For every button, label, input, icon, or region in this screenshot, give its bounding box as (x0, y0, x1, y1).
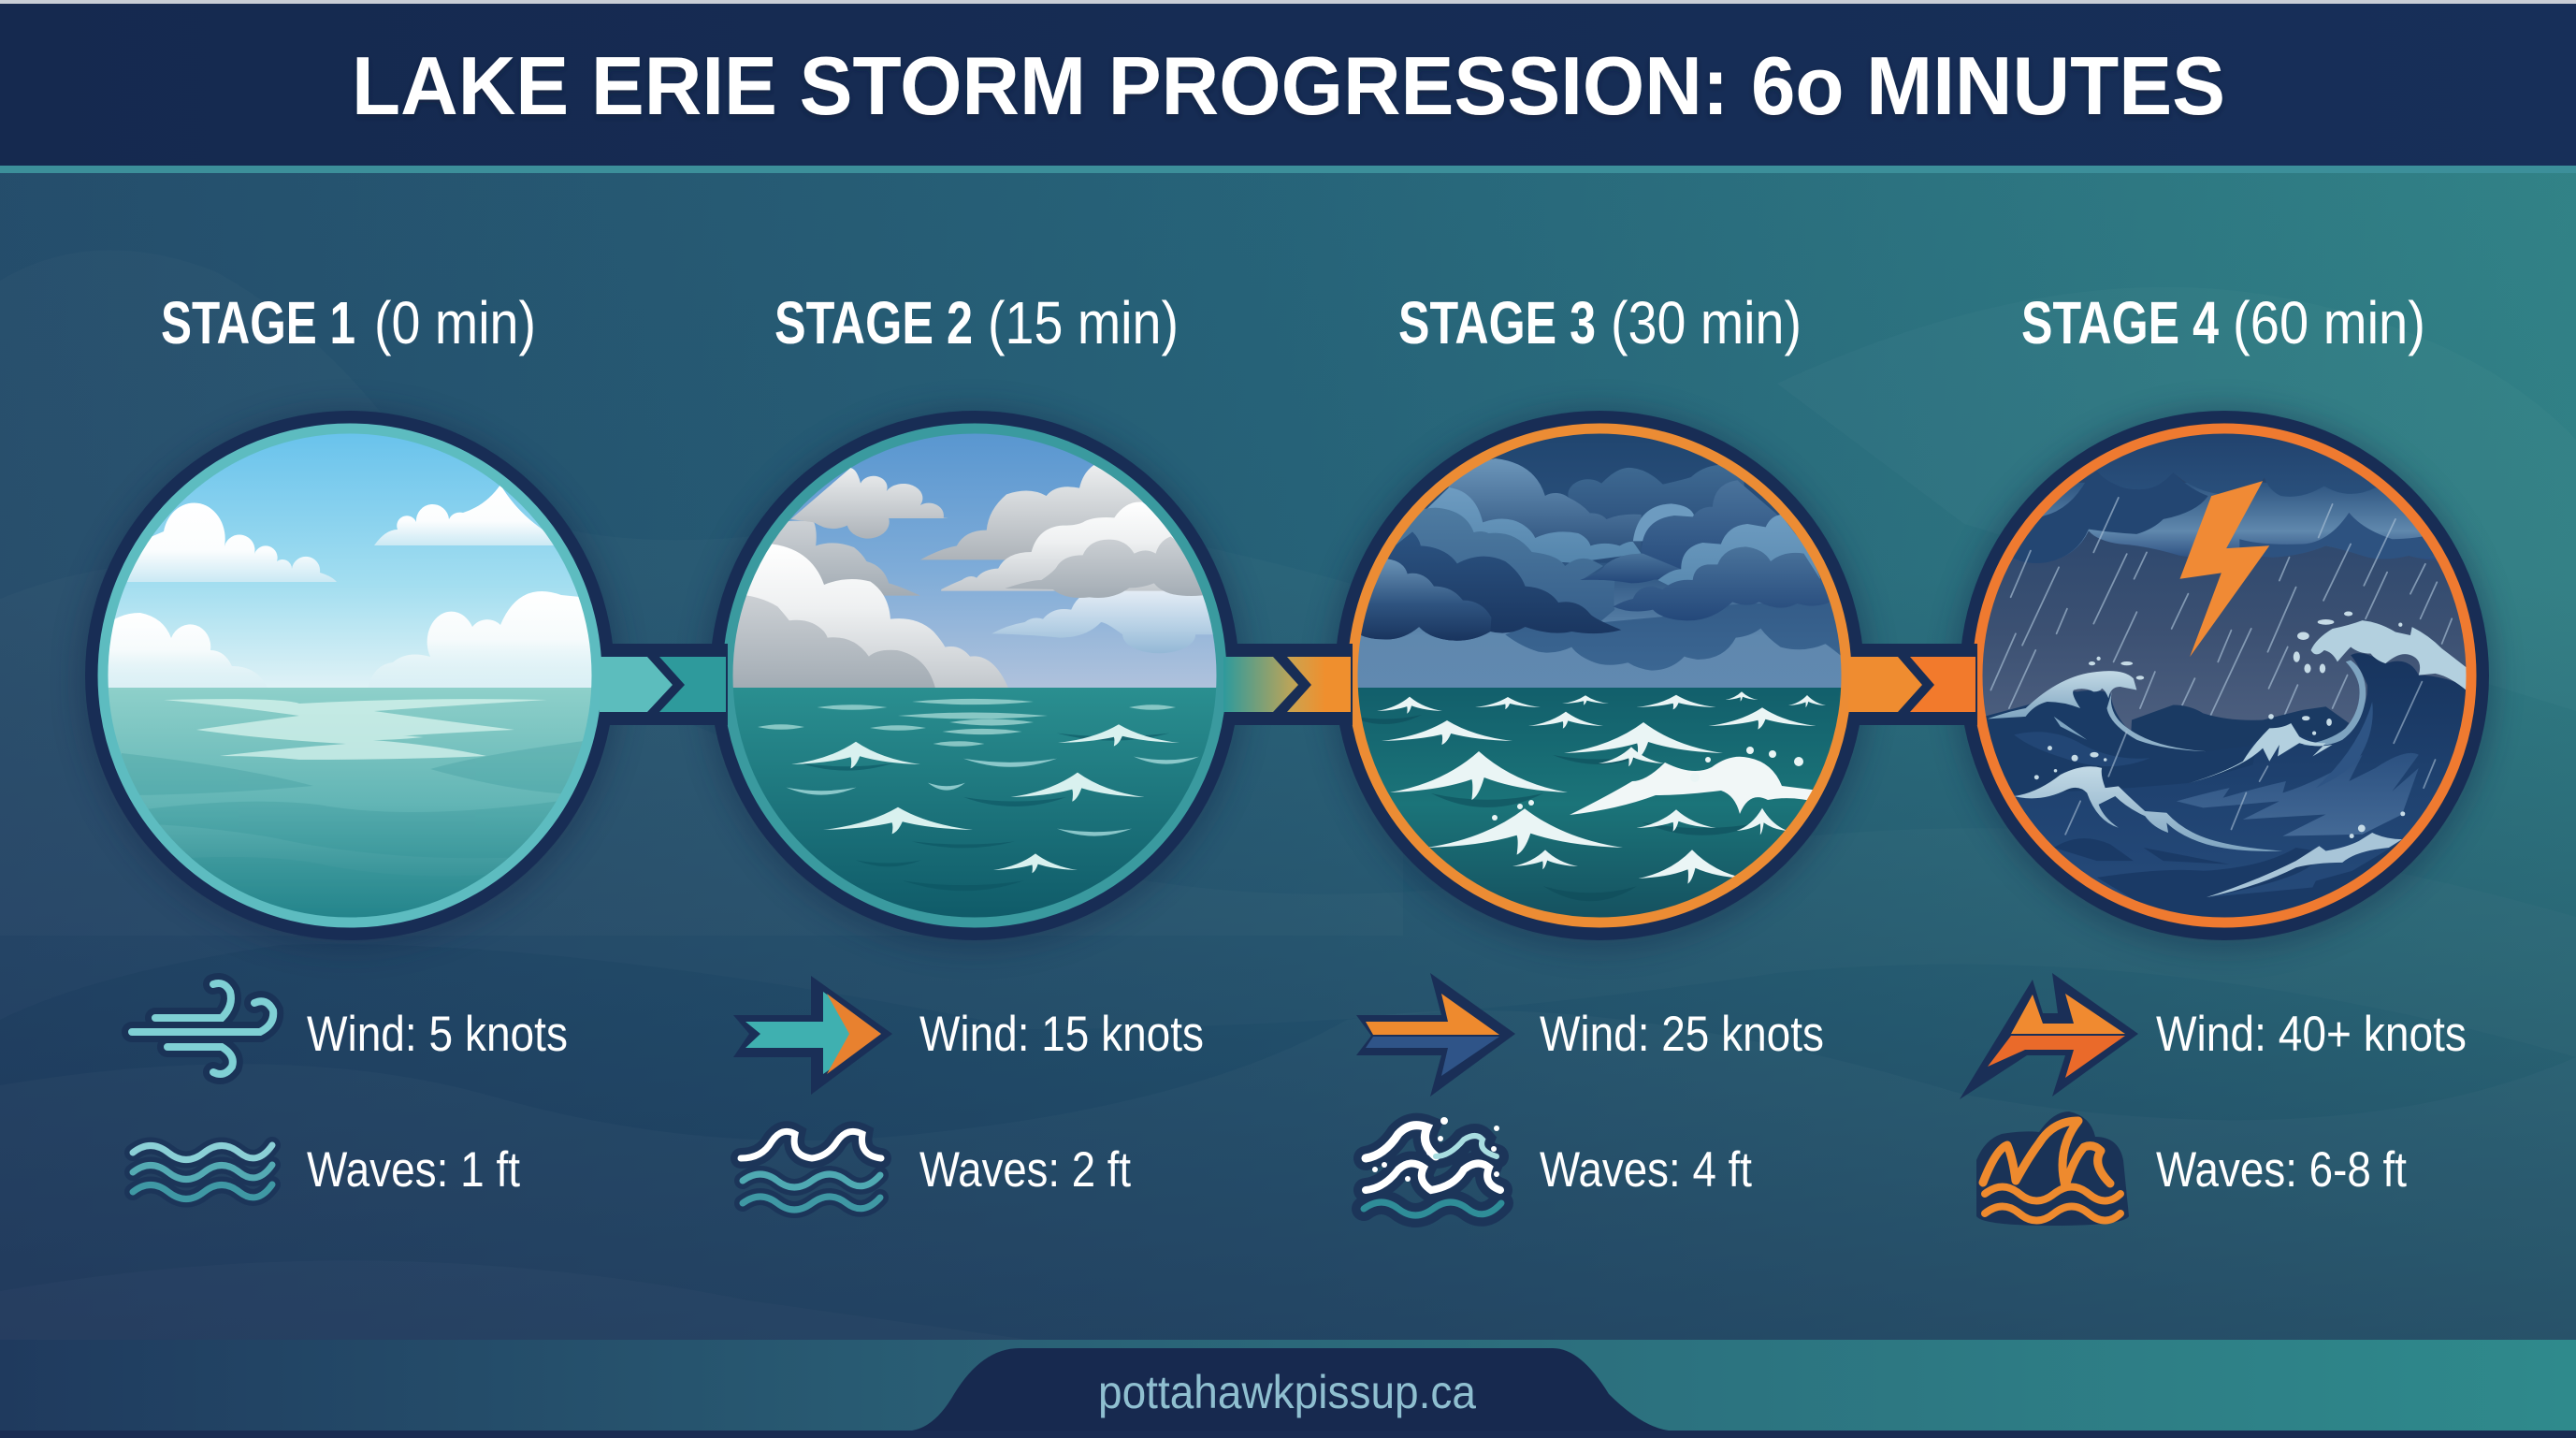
arrow: stage 3 to 4 connector (1848, 644, 1977, 725)
crests (1988, 671, 2136, 719)
small white crests (1377, 691, 1826, 884)
stage 2 heading: STAGE 2 (774, 289, 973, 356)
wind 25 knots label: Wind: 25 knots (1540, 1007, 1824, 1062)
panel: stage 1 calm scene (85, 411, 615, 940)
footer band (0, 1340, 2576, 1438)
stage 3 heading: STAGE 3 (1398, 289, 1596, 356)
stage 3 heading: (30 min) (1611, 289, 1802, 356)
waves 1 ft label: Waves: 1 ft (307, 1142, 520, 1198)
icon: waves 2 ft (741, 1131, 881, 1210)
wind 15 knots label: Wind: 15 knots (919, 1007, 1204, 1062)
far swell (2130, 705, 2349, 762)
footer website: pottahawkpissup.ca (1098, 1366, 1476, 1418)
spray (2034, 612, 2405, 838)
clouds (1359, 458, 1844, 671)
panel: stage 3 building storm scene (1335, 411, 1864, 940)
panel: stage 4 severe storm scene (1960, 411, 2489, 940)
rain (1990, 498, 2452, 734)
arrow: stage 2 to 3 connector (1223, 644, 1353, 725)
stage 2 heading: (15 min) (988, 289, 1179, 356)
stage 1 heading: STAGE 1 (161, 289, 355, 356)
wind 40+ knots label: Wind: 40+ knots (2156, 1007, 2467, 1062)
left wave body (1977, 690, 2256, 794)
lower dark water (2054, 838, 2134, 861)
big wave body (1984, 653, 2472, 927)
icon: waves 6-8 ft (1976, 1111, 2129, 1226)
dark sea patches (1362, 715, 1747, 894)
storm clouds (2013, 483, 2437, 561)
icon: waves 4 ft (1364, 1117, 1501, 1215)
stage 1 heading: (0 min) (374, 289, 536, 356)
icon: waves 1 ft (133, 1145, 272, 1199)
wave crests (791, 724, 1179, 873)
waves 4 ft label: Waves: 4 ft (1540, 1142, 1752, 1198)
sea streaks (2177, 753, 2419, 836)
stage 4 heading: STAGE 4 (2021, 289, 2219, 356)
arrow: stage 1 to 2 connector (600, 644, 728, 725)
icon: wind 15 knots (733, 976, 892, 1095)
large breaking crest (1570, 757, 1819, 815)
waves 2 ft label: Waves: 2 ft (919, 1142, 1131, 1198)
lower rain (2065, 682, 2436, 835)
icon: wind 5 knots (132, 983, 273, 1074)
stage 4 heading: (60 min) (2233, 289, 2425, 356)
lightning (2179, 481, 2269, 657)
clouds (721, 465, 1219, 688)
icon: wind 25 knots (1356, 973, 1515, 1097)
sea lens highlights (758, 699, 1176, 747)
header band (0, 0, 2576, 173)
clouds (109, 486, 591, 675)
waves 6-8 ft label: Waves: 6-8 ft (2156, 1142, 2407, 1198)
panel: stage 2 breezy scene (710, 411, 1239, 940)
wind 5 knots label: Wind: 5 knots (307, 1007, 568, 1062)
icon: wind 40+ knots (1960, 973, 2138, 1099)
water reflections (164, 699, 547, 760)
circle shadows (77, 406, 2497, 952)
title: LAKE ERIE STORM PROGRESSION: 6o MINUTES (352, 39, 2225, 132)
sea dark troughs (800, 734, 1169, 891)
sea bands (122, 741, 582, 842)
